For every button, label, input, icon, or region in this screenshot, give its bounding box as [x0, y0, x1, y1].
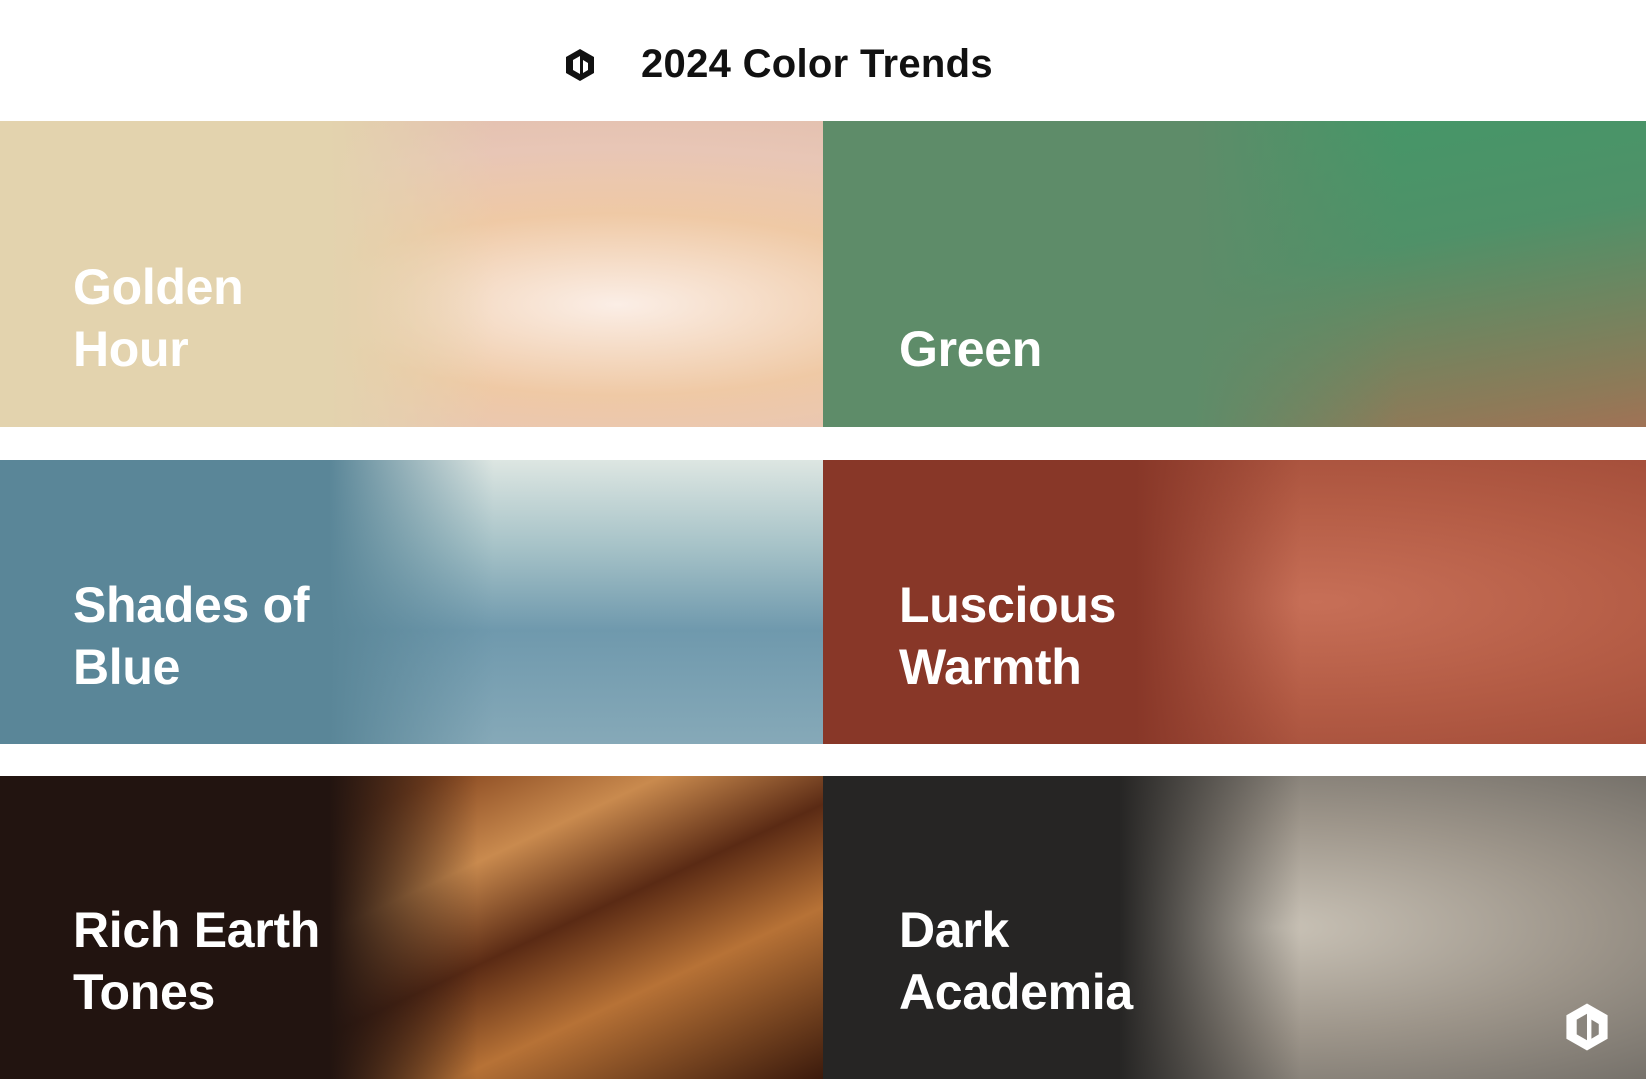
text: dark academia: Academia — [899, 964, 1133, 1020]
panel: luscious warmth — [823, 460, 1646, 744]
text: green: Green — [899, 321, 1042, 377]
text: rich earth tones: Tones — [73, 964, 215, 1020]
text: luscious warmth — [899, 577, 1116, 695]
text: golden hour — [73, 259, 243, 377]
panel: green — [823, 121, 1646, 427]
header: logo and title — [566, 42, 993, 86]
text: dark academia: Dark — [899, 902, 1009, 958]
panel: dark academia — [823, 776, 1646, 1079]
text: luscious warmth: Luscious — [899, 577, 1116, 633]
text: shades of blue: Shades of — [73, 577, 309, 633]
title: 2024 Color Trends — [641, 42, 993, 86]
text: golden hour: Golden — [73, 259, 243, 315]
panel: shades of blue — [0, 460, 823, 744]
text: rich earth tones — [73, 902, 320, 1020]
text: shades of blue: Blue — [73, 639, 180, 695]
panel: golden hour — [0, 121, 823, 427]
icon: corner logo — [1566, 1004, 1608, 1050]
text: dark academia — [899, 902, 1134, 1020]
text: rich earth tones: Rich Earth — [73, 902, 320, 958]
panel: rich earth tones — [0, 776, 823, 1079]
text: golden hour: Hour — [73, 321, 188, 377]
text: luscious warmth: Warmth — [899, 639, 1081, 695]
text: shades of blue — [73, 577, 310, 695]
icon: logo — [566, 49, 594, 81]
